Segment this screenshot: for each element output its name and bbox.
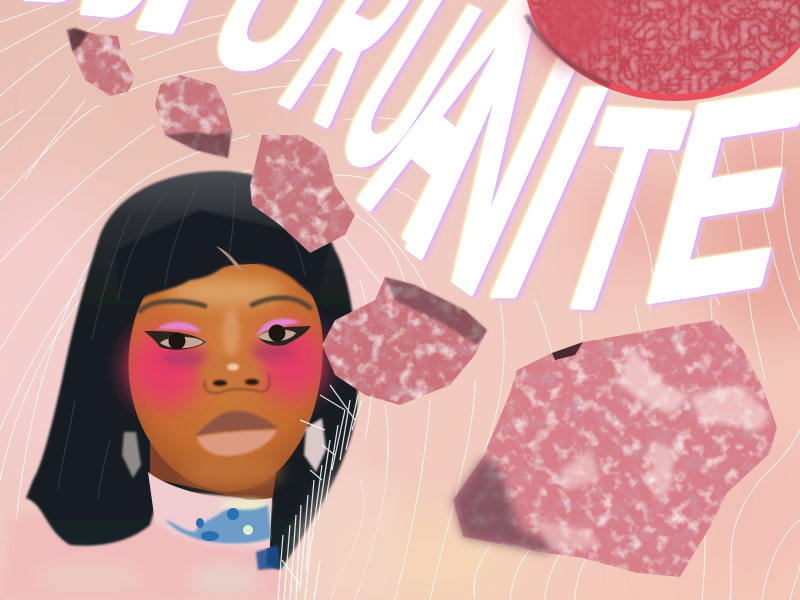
title lettering: I xyxy=(455,27,644,357)
left eye xyxy=(144,331,206,350)
lips xyxy=(195,411,279,456)
jaw lower glow xyxy=(184,456,280,484)
blue stain xyxy=(256,545,280,570)
stray fringe strand xyxy=(216,246,244,272)
fur tufts xyxy=(278,385,400,600)
pink garment xyxy=(0,505,290,600)
nose xyxy=(202,308,270,397)
under-eye purple right xyxy=(250,344,294,360)
face xyxy=(129,262,323,492)
red textured sphere xyxy=(525,0,800,101)
hair sheen strands xyxy=(58,180,305,500)
under-eye purple left xyxy=(161,350,209,366)
eyeshadow xyxy=(157,318,300,337)
neck xyxy=(150,430,280,505)
forehead highlight xyxy=(165,278,285,306)
rock 4 xyxy=(322,277,487,405)
blush left xyxy=(127,328,203,408)
blush right xyxy=(258,324,326,400)
title lettering: T xyxy=(521,49,711,367)
eyebrows xyxy=(140,298,310,311)
woman portrait xyxy=(0,171,358,600)
hair xyxy=(26,171,358,570)
rock 3 xyxy=(250,135,355,253)
rock 5 xyxy=(453,320,777,577)
turtleneck collar xyxy=(148,472,272,548)
bangs xyxy=(115,210,330,300)
title lettering xyxy=(14,0,800,367)
rock 1 xyxy=(67,28,135,96)
right eye xyxy=(258,324,311,346)
rock 2 xyxy=(155,75,232,158)
earrings xyxy=(122,418,326,478)
